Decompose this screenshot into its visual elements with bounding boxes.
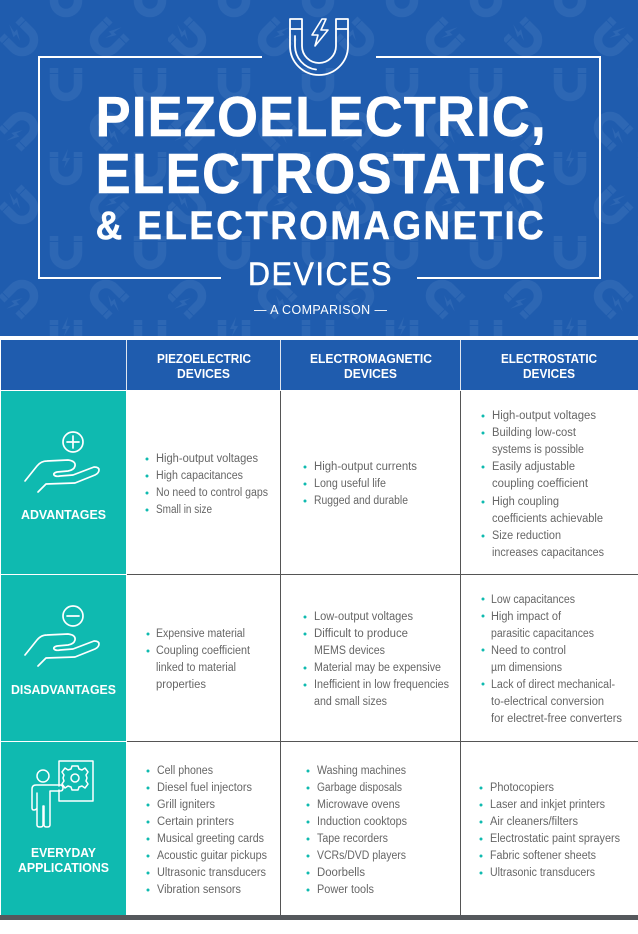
- icon: person presenting gear: [32, 761, 93, 827]
- panel: disadvantages label: [1, 575, 126, 741]
- label: everyday applications: [18, 846, 109, 875]
- title text: [96, 84, 546, 248]
- heading: piezoelectric devices: [157, 352, 251, 381]
- heading: piezoelectric devices: DEVICES: [177, 367, 230, 381]
- text block: electromagnetic applications: Washing machines: [317, 765, 406, 777]
- text block: electrostatic disadvantages: Lack of direct mechanical-: [491, 679, 615, 691]
- text block: electrostatic disadvantages: for electret-free converters: [491, 713, 622, 725]
- text block: electromagnetic disadvantages: Difficult to produce: [314, 628, 408, 640]
- text block: piezoelectric disadvantages: Expensive material: [156, 628, 245, 640]
- text block: electrostatic applications: Fabric softener sheets: [490, 850, 596, 862]
- text block: electromagnetic applications: Microwave ovens: [317, 799, 400, 811]
- bottom bar: [0, 915, 638, 920]
- text block: electromagnetic disadvantages: Inefficient in low frequencies: [314, 679, 449, 691]
- subtitle: a comparison: — A COMPARISON —: [254, 303, 388, 317]
- text block: electrostatic advantages: Building low-cost: [492, 427, 577, 439]
- text block: electromagnetic disadvantages: Material may be expensive: [314, 662, 441, 674]
- text block: piezoelectric advantages: [146, 453, 268, 516]
- text block: electrostatic applications: [480, 782, 620, 879]
- text block: electromagnetic applications: Doorbells: [317, 867, 365, 879]
- text block: piezoelectric applications: Musical greeting cards: [157, 833, 264, 845]
- text block: electromagnetic applications: Induction cooktops: [317, 816, 407, 828]
- text block: electromagnetic advantages: Long useful life: [314, 478, 386, 490]
- heading: electrostatic devices: DEVICES: [523, 367, 575, 381]
- text block: piezoelectric advantages: No need to control gaps: [156, 487, 268, 499]
- icon: magnet: [290, 19, 348, 75]
- label: everyday applications: APPLICATIONS: [18, 861, 109, 875]
- text block: electromagnetic applications: VCRs/DVD players: [317, 850, 406, 862]
- text block: electromagnetic advantages: Rugged and durable: [314, 495, 408, 507]
- text block: electrostatic advantages: systems is possible: [492, 444, 584, 456]
- text block: electromagnetic applications: [306, 765, 407, 896]
- text block: piezoelectric applications: Diesel fuel injectors: [157, 782, 252, 794]
- subtitle: devices: DEVICES: [248, 256, 391, 292]
- icon: hand with plus: [25, 432, 99, 492]
- text block: electrostatic advantages: High-output voltages: [492, 410, 596, 422]
- heading: electrostatic devices: [501, 352, 597, 381]
- text block: electrostatic advantages: Size reduction: [492, 530, 561, 542]
- text block: electrostatic applications: Air cleaners/filters: [490, 816, 578, 828]
- text block: electrostatic disadvantages: to-electrical conversion: [491, 696, 604, 708]
- text block: piezoelectric disadvantages: linked to material: [156, 662, 236, 674]
- text block: electrostatic applications: Laser and inkjet printers: [490, 799, 605, 811]
- text block: electrostatic disadvantages: [482, 594, 622, 725]
- panel: table header: [1, 340, 638, 390]
- text block: electrostatic disadvantages: µm dimensions: [491, 662, 562, 674]
- text block: piezoelectric advantages: Small in size: [156, 504, 212, 516]
- icon: hand with minus: [25, 606, 99, 666]
- heading: electromagnetic devices: [310, 352, 432, 381]
- text block: electrostatic advantages: coupling coefficient: [492, 478, 589, 490]
- text block: electromagnetic disadvantages: and small sizes: [314, 696, 387, 708]
- panel: title header: [0, 0, 638, 336]
- text block: electrostatic advantages: [482, 410, 604, 559]
- heading: electromagnetic devices: ELECTROMAGNETIC: [310, 352, 432, 366]
- text block: piezoelectric applications: Acoustic guitar pickups: [157, 850, 267, 862]
- text block: electrostatic applications: Ultrasonic transducers: [490, 867, 595, 879]
- text block: piezoelectric advantages: High capacitances: [156, 470, 243, 482]
- heading: electrostatic devices: ELECTROSTATIC: [501, 352, 597, 366]
- text block: electrostatic disadvantages: High impact of: [491, 611, 562, 623]
- text block: piezoelectric applications: Certain printers: [157, 816, 234, 828]
- text block: electrostatic advantages: High coupling: [492, 496, 559, 508]
- text block: electrostatic advantages: increases capacitances: [492, 547, 604, 559]
- text block: electromagnetic disadvantages: [304, 611, 449, 708]
- text block: electromagnetic applications: Garbage disposals: [317, 782, 402, 794]
- text block: electromagnetic advantages: [304, 461, 417, 507]
- text block: electrostatic advantages: Easily adjustable: [492, 461, 575, 473]
- heading: piezoelectric devices: PIEZOELECTRIC: [157, 352, 251, 366]
- text block: electrostatic disadvantages: Need to control: [491, 645, 566, 657]
- label: advantages: ADVANTAGES: [21, 508, 106, 522]
- heading: electromagnetic devices: DEVICES: [344, 367, 397, 381]
- text block: electrostatic disadvantages: parasitic capacitances: [491, 628, 594, 640]
- text block: electromagnetic disadvantages: MEMS devices: [314, 645, 385, 657]
- text block: piezoelectric disadvantages: Coupling coefficient: [156, 645, 251, 657]
- label: disadvantages: DISADVANTAGES: [11, 683, 116, 697]
- text block: electrostatic applications: Photocopiers: [490, 782, 554, 794]
- panel: advantages label: [1, 391, 126, 574]
- text block: piezoelectric disadvantages: [146, 628, 251, 691]
- text block: piezoelectric applications: Grill igniters: [157, 799, 215, 811]
- text block: electromagnetic advantages: High-output currents: [314, 461, 417, 473]
- text block: piezoelectric applications: Vibration sensors: [157, 884, 241, 896]
- title text: & ELECTROMAGNETIC: [96, 204, 544, 248]
- title text: ELECTROSTATIC: [96, 141, 546, 205]
- text block: piezoelectric advantages: High-output voltages: [156, 453, 258, 465]
- label: everyday applications: EVERYDAY: [31, 846, 97, 860]
- text block: piezoelectric applications: [146, 765, 267, 896]
- title text: PIEZOELECTRIC,: [96, 84, 546, 148]
- table grid: [127, 391, 638, 915]
- text block: electrostatic applications: Electrostatic paint sprayers: [490, 833, 620, 845]
- text block: electromagnetic disadvantages: Low-output voltages: [314, 611, 413, 623]
- text block: electrostatic disadvantages: Low capacitances: [491, 594, 575, 606]
- text block: piezoelectric disadvantages: properties: [156, 679, 206, 691]
- text block: piezoelectric applications: Ultrasonic transducers: [157, 867, 266, 879]
- text block: electromagnetic applications: Tape recorders: [317, 833, 388, 845]
- text block: piezoelectric applications: Cell phones: [157, 765, 213, 777]
- text block: electromagnetic applications: Power tools: [317, 884, 374, 896]
- title frame: [39, 57, 600, 278]
- text block: electrostatic advantages: coefficients achievable: [492, 513, 603, 525]
- panel: everyday applications label: [1, 742, 126, 915]
